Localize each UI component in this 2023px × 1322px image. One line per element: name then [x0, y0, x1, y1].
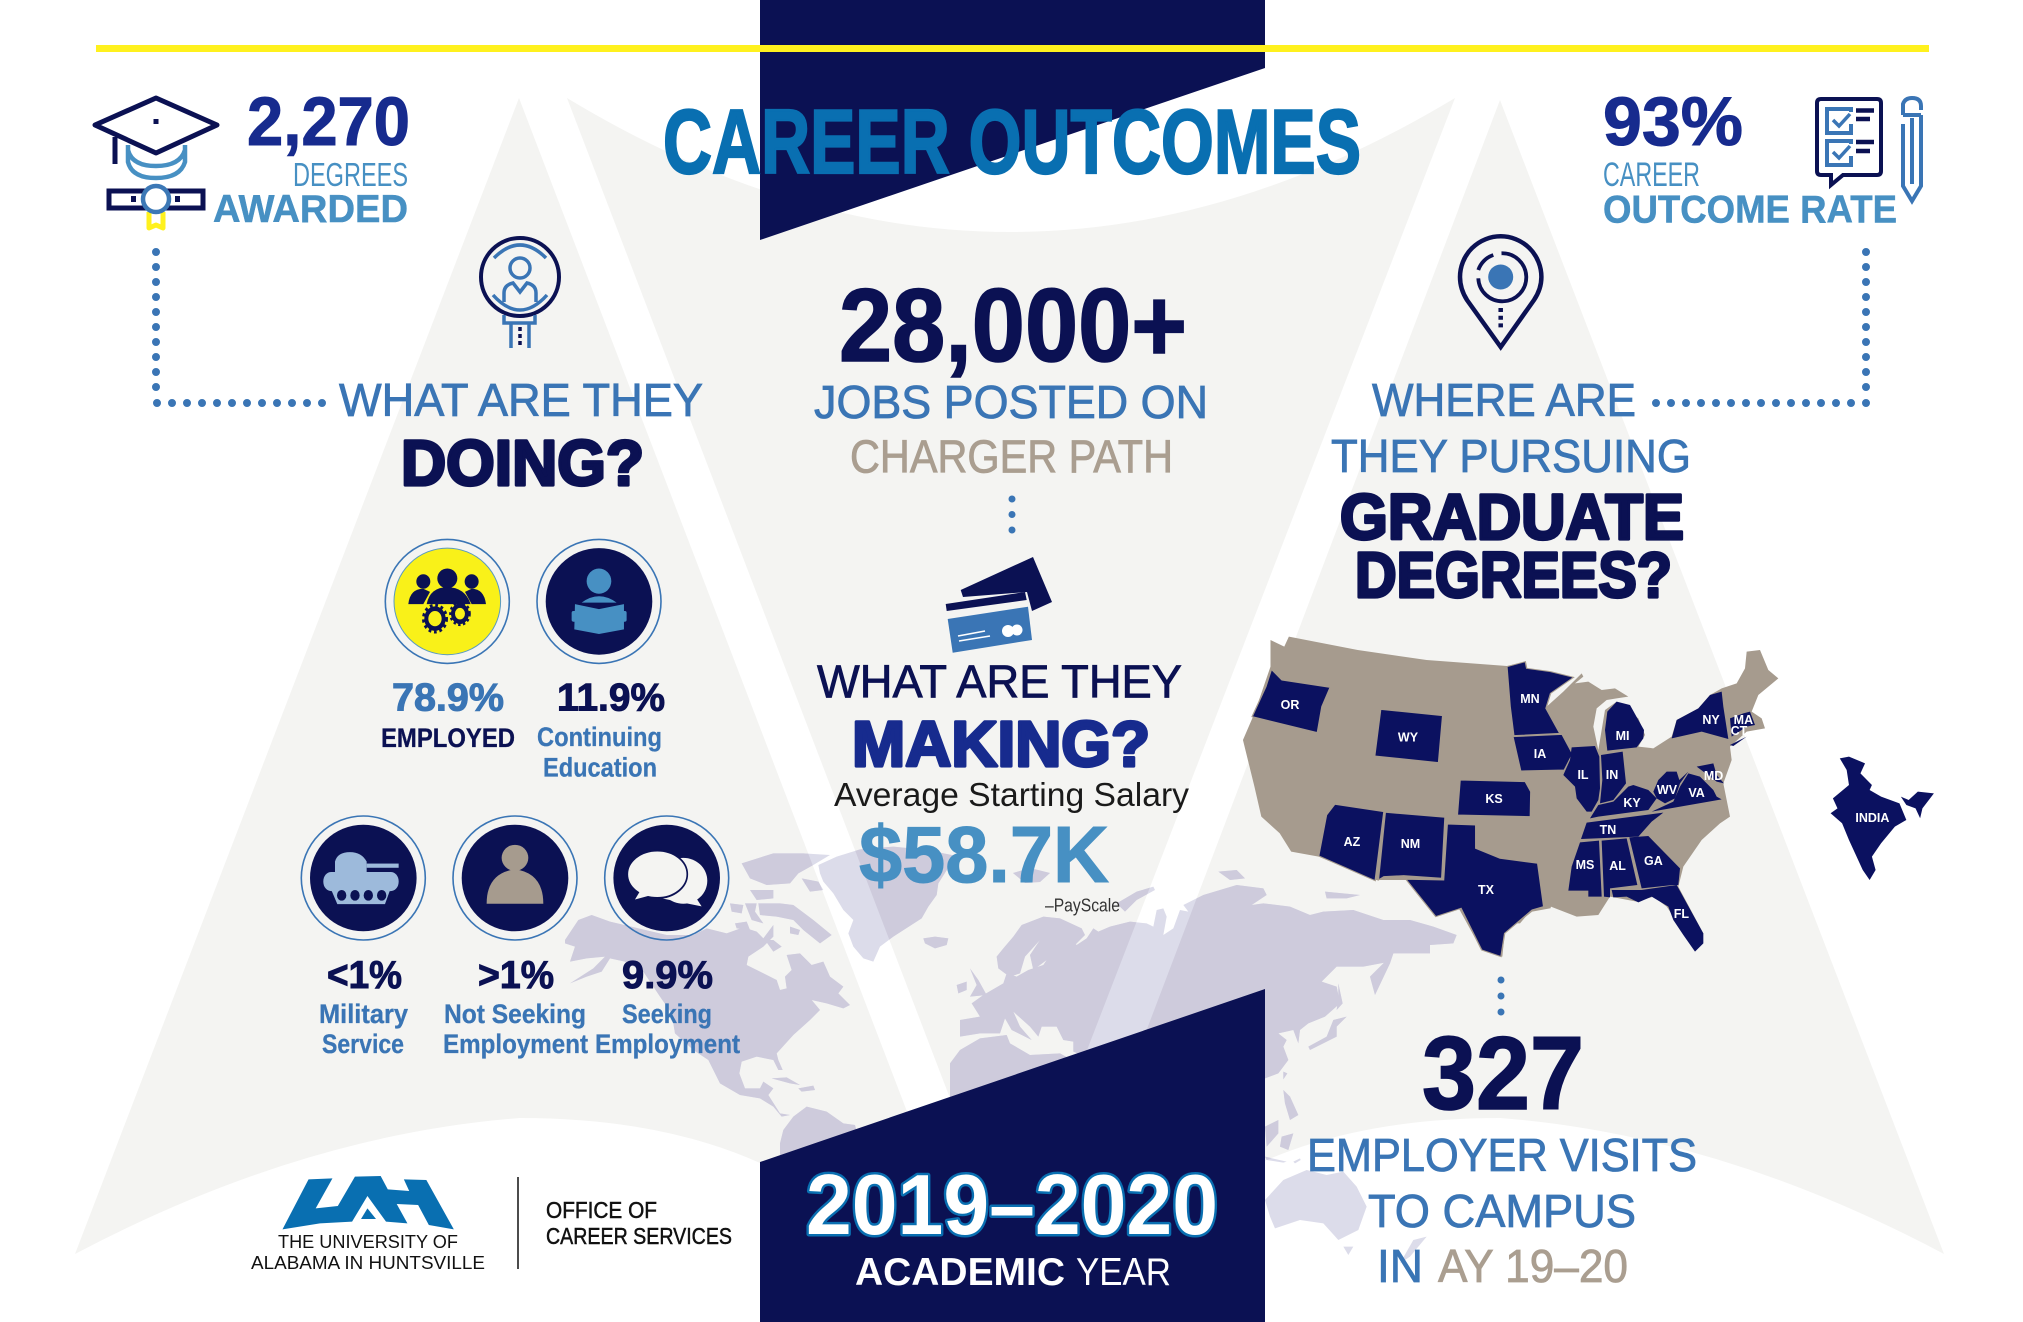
icon: person in magnifier: [481, 238, 559, 348]
chart: US map of graduate states: IL: [1577, 768, 1589, 782]
heading: what are they making: WHAT ARE THEY: [817, 656, 1182, 708]
chart: US map of graduate states: IA: [1534, 747, 1546, 761]
label: jobs posted on: JOBS POSTED ON: [814, 376, 1208, 428]
panel: academic year: YEAR: [1076, 1251, 1171, 1294]
chart: US map of graduate states: OR: [1281, 698, 1299, 712]
icon: reader: [537, 539, 661, 663]
stat: salary: $58.7K: [859, 810, 1109, 899]
stat: 93%: 93%: [1603, 83, 1743, 160]
heading: what are they doing: WHAT ARE THEY: [339, 374, 703, 426]
chart: US map of graduate states: KS: [1485, 792, 1503, 806]
panel: employer visits: AY 19–20: [1438, 1240, 1628, 1292]
panel: university logo: CAREER SERVICES: [546, 1223, 732, 1249]
source: –PayScale: [1045, 895, 1120, 916]
heading: 2019–2020: 2019–2020: [806, 1158, 1218, 1253]
heading: where are they pursuing graduate degrees: DEGREES?: [1355, 539, 1672, 611]
stat: 327: 327: [1422, 1016, 1584, 1132]
label: academic year: ACADEMIC: [855, 1251, 1065, 1294]
label: awarded: AWARDED: [213, 188, 408, 231]
chart: US map of graduate states: FL: [1674, 907, 1689, 921]
label: continuing education: Education: [543, 752, 657, 782]
chart: US map of graduate states: [1243, 637, 1934, 957]
chart: US map of graduate states: VA: [1688, 786, 1705, 800]
heading: where are they pursuing graduate degrees: WHERE ARE: [1372, 374, 1636, 426]
icon: checklist: [1817, 99, 1881, 185]
label: career: CAREER: [1603, 156, 1700, 194]
panel: salary: MAKING?: [852, 708, 1150, 780]
text: office of career services: OFFICE OF: [546, 1197, 657, 1223]
title: CAREER OUTCOMES: [663, 92, 1361, 193]
icon: UAH logo: [282, 1176, 454, 1229]
stat: 11.9%: 11.9%: [557, 676, 665, 720]
yellow rule: [96, 45, 1929, 52]
chart: US map of graduate states: WV: [1657, 783, 1678, 797]
label: not seeking employment: [443, 999, 588, 1059]
label: not seeking employment: Employment: [443, 1029, 588, 1059]
label: seeking employment: [595, 999, 740, 1059]
chart: US map of graduate states: TX: [1478, 883, 1495, 897]
chart: US map of graduate states: NM: [1401, 837, 1420, 851]
label: employer visits: EMPLOYER VISITS: [1307, 1129, 1697, 1181]
panel: continuing education: [537, 539, 665, 782]
chart: US map of graduate states: KY: [1623, 796, 1641, 810]
panel: not seeking employment: [443, 816, 588, 1059]
label: seeking employment: Employment: [595, 1029, 740, 1059]
icon: location pin: [1460, 236, 1541, 347]
stat: 78.9%: 78.9%: [392, 676, 504, 720]
panel: salary: [817, 656, 1190, 916]
label: military service: [319, 999, 408, 1059]
top navy banner: [760, 0, 1265, 240]
label: continuing education: [537, 722, 662, 782]
label: continuing education: Continuing: [537, 722, 662, 752]
heading: what are they doing: DOING?: [401, 427, 644, 499]
label: charger path: CHARGER PATH: [850, 431, 1173, 483]
world map background: [565, 847, 1457, 1263]
panel: military service: [301, 816, 425, 1059]
heading: where are they pursuing graduate degrees: GRADUATE: [1340, 481, 1684, 553]
panel: jobs posted: [814, 268, 1208, 483]
dotted connector right: [1655, 252, 1866, 403]
stat: 2,270: 2,270: [247, 83, 410, 160]
label: military service: Military: [319, 999, 408, 1029]
label: outcome rate: OUTCOME RATE: [1603, 189, 1897, 232]
stat: >1%: >1%: [478, 954, 554, 997]
dotted connector lower right: [1498, 980, 1504, 1014]
chart: US map of graduate states: GA: [1644, 854, 1663, 868]
bottom navy banner: [760, 989, 1265, 1322]
text: university name: THE UNIVERSITY OF: [278, 1232, 458, 1252]
label: employed: EMPLOYED: [381, 723, 515, 753]
panel: employer visits: TO CAMPUS: [1368, 1185, 1636, 1237]
heading: where are they pursuing graduate degrees: THEY PURSUING: [1331, 430, 1691, 482]
icon: people and gears: [385, 539, 509, 663]
label: degrees: DEGREES: [293, 156, 408, 193]
chart: US map of graduate states: MA: [1734, 713, 1753, 727]
chart: US map of graduate states: AL: [1609, 859, 1626, 873]
panel: seeking employment: [595, 816, 740, 1059]
chart: US map of graduate states: MI: [1616, 729, 1630, 743]
chart: US map of graduate states: MN: [1520, 692, 1540, 706]
dotted connector centre: [1008, 499, 1016, 532]
stat: 9.9%: 9.9%: [622, 954, 713, 997]
panel: degrees awarded: [95, 83, 410, 231]
icon: person: [453, 816, 577, 940]
panel: university logo: ALABAMA IN HUNTSVILLE: [251, 1253, 485, 1273]
icon: speech bubbles: [605, 816, 729, 940]
panel: employer visits: [1307, 1016, 1697, 1292]
label: seeking employment: Seeking: [622, 999, 712, 1029]
heading: what are they doing: [339, 374, 703, 499]
stat: <1%: <1%: [327, 954, 402, 997]
heading: where are they pursuing graduate degrees: [1331, 374, 1691, 611]
icon: tank: [301, 816, 425, 940]
icon: pencil: [1903, 98, 1921, 201]
panel: employer visits: IN: [1377, 1240, 1423, 1292]
chart: US map of graduate states: MD: [1704, 769, 1723, 783]
panel: employed: [381, 539, 515, 753]
dotted connector left: [156, 252, 323, 403]
chart: US map of graduate states: AZ: [1344, 835, 1361, 849]
chart: US map of graduate states: WY: [1398, 731, 1419, 745]
stat: 28,000+: 28,000+: [839, 268, 1187, 384]
label: not seeking employment: Not Seeking: [444, 999, 586, 1029]
chart: US map of graduate states: NY: [1702, 713, 1720, 727]
icon: graduation cap and diploma: [95, 98, 217, 228]
chart: US map of graduate states: TN: [1600, 823, 1616, 837]
panel: university logo: [251, 1176, 732, 1273]
label: average starting salary: Average Starting Salary: [834, 776, 1190, 813]
label: military service: Service: [322, 1029, 404, 1059]
chart: US map of graduate states: IN: [1606, 768, 1618, 782]
chart: US map of graduate states: MS: [1576, 858, 1594, 872]
panel: career outcome rate: [1603, 83, 1921, 232]
icon: credit cards: [946, 557, 1052, 653]
panel: academic year: [806, 1158, 1218, 1294]
chart: US map of graduate states: INDIA: [1855, 811, 1889, 825]
chart: US map of graduate states: CT: [1731, 724, 1748, 738]
